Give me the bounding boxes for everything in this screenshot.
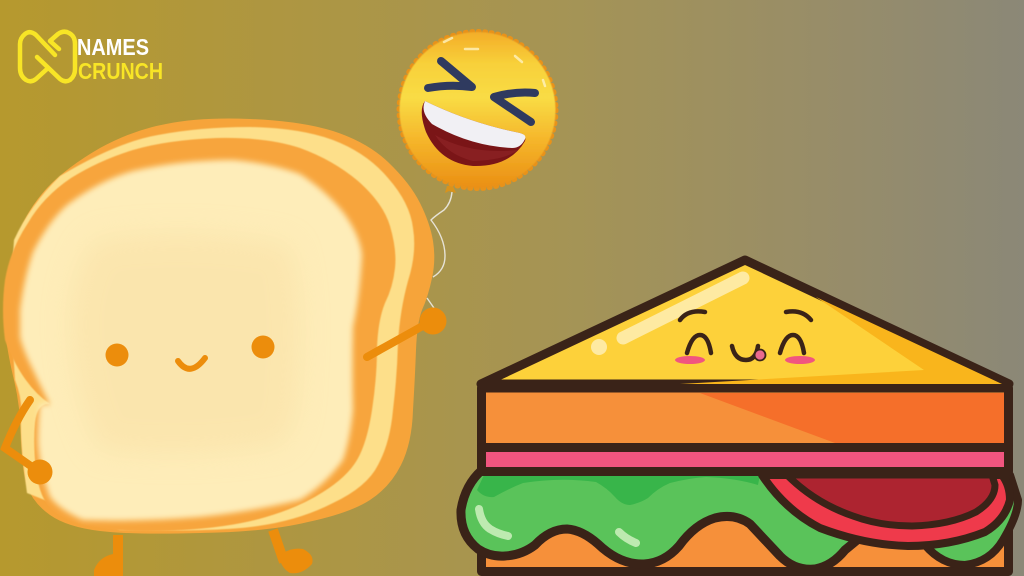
sandwich top crust layer [482,388,1008,448]
emoji right eye [494,92,535,122]
bread right eye [252,336,274,358]
lettuce highlight small [619,532,636,543]
bread smile [178,358,205,369]
bread front crust [3,138,395,531]
bread right arm [367,308,446,357]
icon: logo N mark [20,32,75,81]
tongue [754,350,766,360]
bread cream band [10,127,414,530]
left cheek [675,356,705,364]
tomato slice [762,475,1010,546]
cheese shadow [680,297,1002,384]
sandwich bottom bread [482,480,1008,572]
emoji left eye [428,61,472,88]
lettuce right [925,475,1018,565]
emoji mouth [422,101,525,166]
lettuce shade [477,475,760,505]
right cheek [785,356,815,364]
sandwich face [680,311,811,360]
bread crumb texture [70,234,300,454]
bread left arm [5,400,52,484]
cheese highlight bar [623,278,743,338]
character: bread slice [3,119,446,576]
bread left eye [106,344,128,366]
emoji teeth [424,101,525,148]
balloon string [427,192,452,308]
icon: laughing emoji balloon [399,32,556,193]
tomato skin [762,475,1010,546]
bread back crust [4,119,434,534]
logo: Names Crunch [20,32,163,84]
tomato flesh [787,475,995,526]
bread legs and feet [94,530,313,576]
emoji mouth lighter band [435,135,518,161]
character: sandwich [461,260,1018,572]
balloon scalloped edge [399,32,556,188]
cheese highlight dot [591,339,607,355]
balloon shine [444,38,545,86]
cheese triangle [481,260,1009,384]
crust shadow [700,393,1004,443]
bread crumb [20,160,362,521]
balloon body [400,32,556,188]
logo text: CRUNCH: CRUNCH [78,58,163,84]
pink ham layer [482,448,1008,472]
logo text: NAMES: NAMES [77,34,149,60]
lettuce left [461,470,870,569]
balloon knot [445,186,456,193]
lettuce highlight large [479,509,508,536]
